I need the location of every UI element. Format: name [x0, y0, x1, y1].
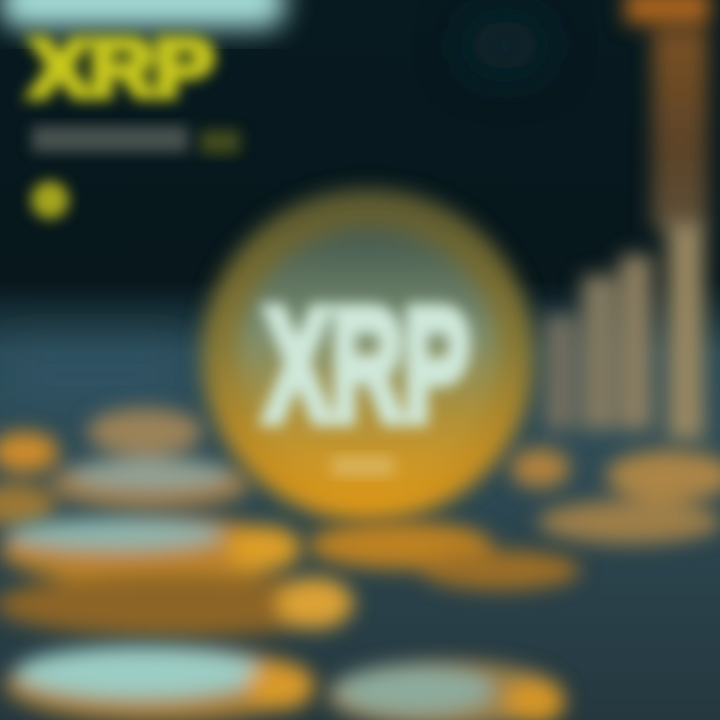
stacked coins: back row right — [510, 448, 720, 544]
coin face — [238, 228, 498, 488]
top banner glow — [0, 0, 285, 28]
coin lettering: XRP — [264, 275, 470, 454]
bar chart: rising bars on the right — [545, 0, 710, 440]
foreground coins left — [0, 516, 355, 637]
heading: XRP: XRP — [30, 23, 214, 114]
coin base: front gold stack — [308, 521, 580, 590]
coin rim — [202, 189, 534, 521]
foreground coin: bottom left — [5, 646, 315, 720]
yellow bullet icon — [31, 181, 69, 219]
background glow: dark teal patches — [0, 19, 545, 405]
foreground coin: bottom centre — [327, 661, 565, 720]
coin small caption — [332, 456, 394, 476]
subtitle text block — [32, 126, 240, 154]
large XRP coin — [202, 189, 534, 521]
stacked coins: back row left — [0, 408, 250, 527]
